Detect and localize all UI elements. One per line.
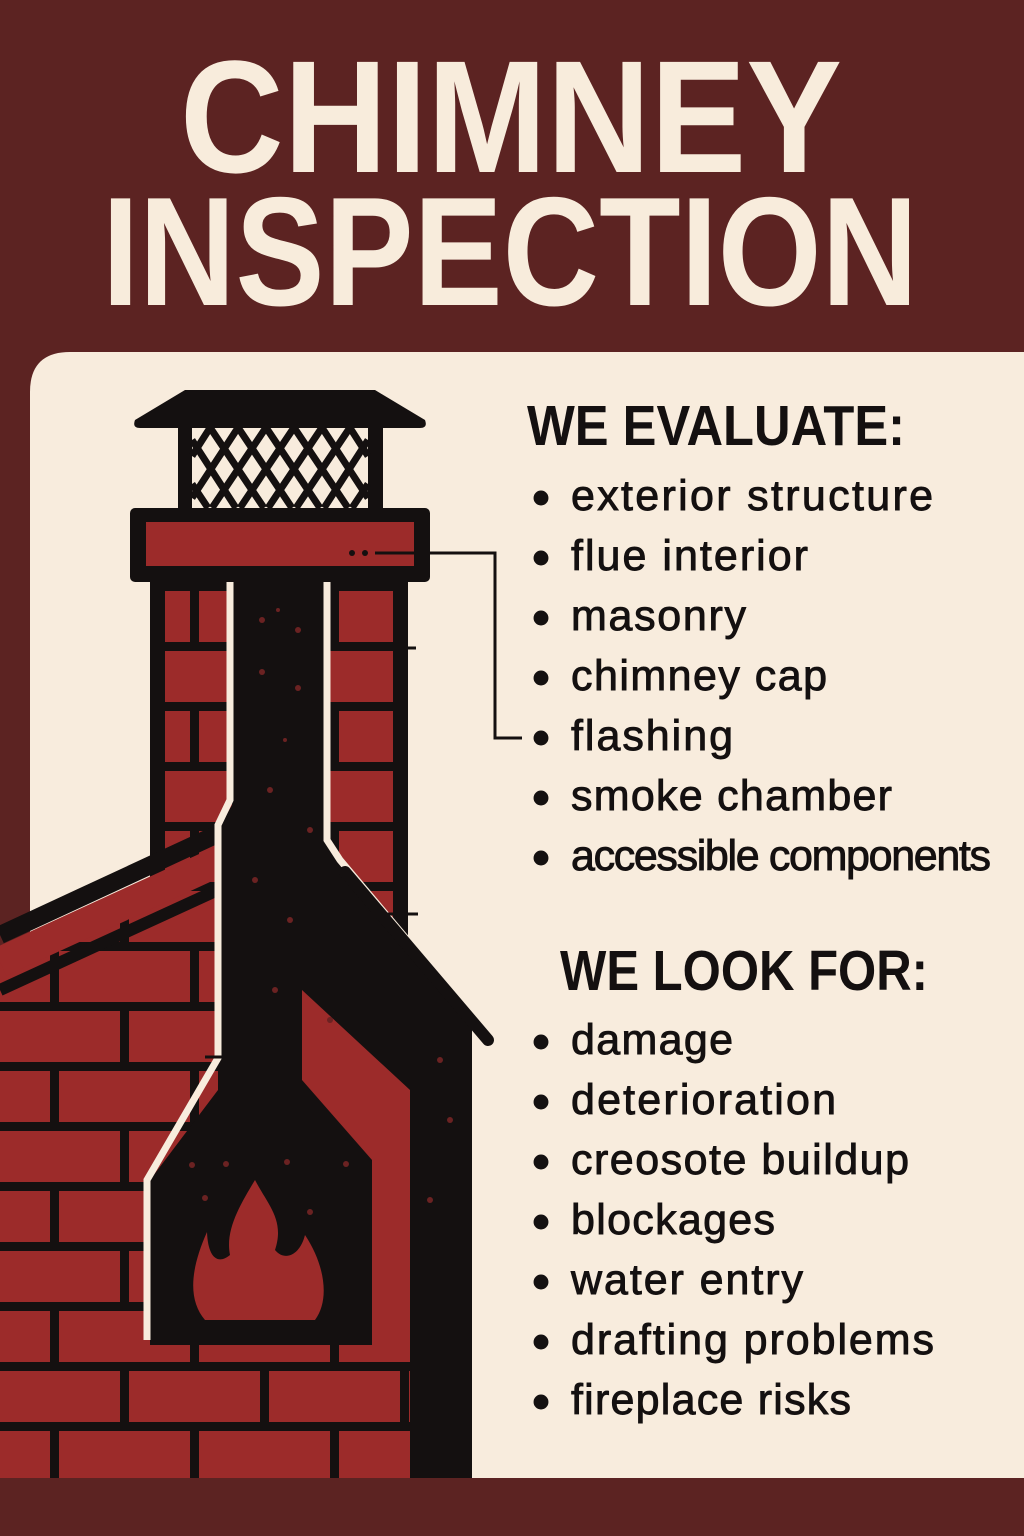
panel: cream content area (30, 352, 1024, 1478)
list: look-for items: damage (571, 1016, 733, 1064)
list: evaluate items: masonry (571, 592, 746, 640)
illustration: chimney and house (0, 390, 488, 1478)
firebox red inner wall (302, 990, 410, 1345)
list: look-for items: drafting problems (571, 1316, 934, 1364)
title: CHIMNEY (180, 27, 842, 206)
list: look-for items: deterioration (571, 1076, 836, 1124)
list: look-for items: blockages (571, 1196, 775, 1244)
bottom bar (0, 1478, 1024, 1536)
list: evaluate items (534, 472, 991, 880)
list: look-for items: water entry (570, 1256, 804, 1304)
list: look-for items (534, 1016, 934, 1424)
title: INSPECTION (102, 165, 918, 338)
flue and firebox black body (150, 582, 472, 1478)
list: look-for items: fireplace risks (571, 1376, 851, 1424)
chimney crown (130, 508, 430, 582)
soot dots (189, 608, 453, 1215)
icon: flame (193, 1180, 324, 1320)
flue lining cream lines (147, 582, 230, 1340)
list: evaluate items: accessible components (571, 832, 991, 880)
heading: we look for: WE LOOK FOR: (560, 939, 928, 1003)
chimney cap mesh (178, 418, 383, 510)
list: evaluate items: chimney cap (571, 652, 827, 700)
callout connector lines (205, 553, 522, 1057)
roof left (0, 832, 222, 935)
list: look-for items: creosote buildup (571, 1136, 909, 1184)
title (102, 27, 918, 338)
house brick wall (0, 850, 220, 1478)
heading: we evaluate: WE EVALUATE: (527, 394, 905, 458)
chimney stack bricks (150, 575, 408, 960)
list: evaluate items: smoke chamber (571, 772, 892, 820)
chimney cap roof (134, 390, 426, 428)
list: evaluate items: exterior structure (571, 472, 933, 520)
list: evaluate items: flashing (571, 712, 733, 760)
list: evaluate items: flue interior (571, 532, 808, 580)
